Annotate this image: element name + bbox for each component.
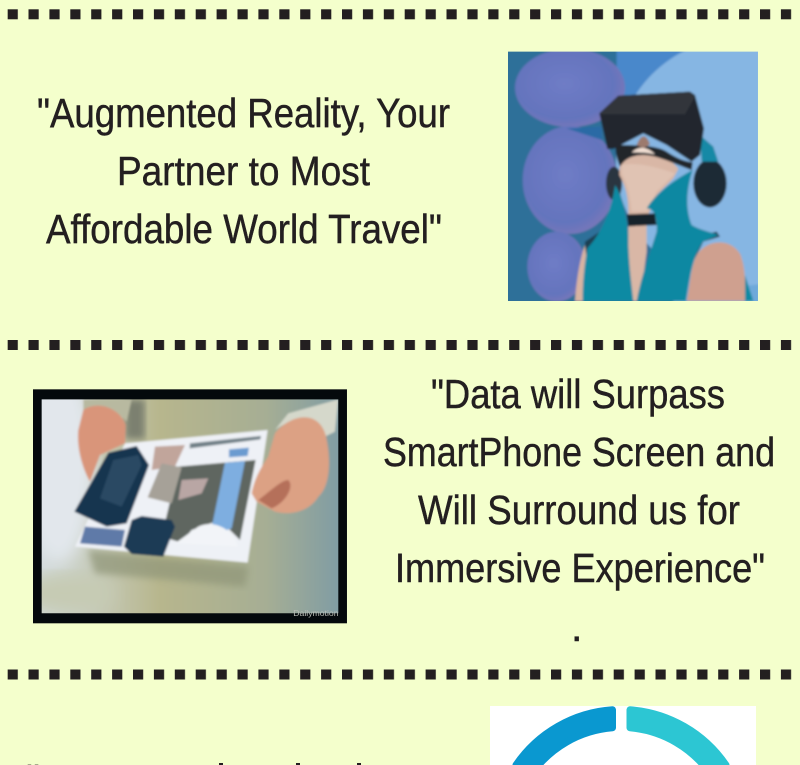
sub-element: left arm: [575, 245, 587, 301]
sub-element: dark blue footstool: [124, 516, 175, 557]
sub-element: shoulder: [687, 242, 745, 301]
donut chart, top two segments: [490, 706, 756, 765]
heading: data surpass smartphone quote: [383, 371, 775, 650]
sub-element: right hand: [252, 417, 329, 513]
sub-element: dark top strap: [584, 230, 721, 258]
sub-element: headphone: [606, 135, 727, 207]
sub-element: neck and chest: [619, 153, 678, 301]
heading: data surpass smartphone quote: Will Surround us for: [418, 487, 740, 533]
sub-element: watermark: Dailymotion: [293, 608, 339, 618]
heading: augmented reality travel quote: [37, 90, 450, 252]
teal segment: [630, 710, 726, 765]
heading: augmented reality travel quote: Affordable World Travel": [46, 206, 442, 252]
blue segment: [516, 710, 612, 765]
heading: data surpass smartphone quote: .: [571, 604, 582, 650]
sub-element: choker: [627, 213, 657, 226]
sub-element: left sleeve: [83, 399, 132, 422]
photo: woman wearing VR headset: [508, 52, 758, 301]
sub-element: teal hair: [583, 185, 633, 301]
photo: hands holding IKEA catalogue with AR furniture: [33, 389, 347, 624]
sub-element: left hand: [78, 406, 126, 482]
heading: augmented reality travel quote: Partner to Most: [117, 148, 371, 194]
sub-element: catalogue page: [75, 430, 268, 563]
heading: data surpass smartphone quote: "Data will Surpass: [431, 371, 725, 417]
sub-element: right sleeve: [275, 399, 338, 437]
sub-element: grey table: [148, 463, 182, 503]
sub-element: dark blue sofa: [74, 446, 149, 527]
sub-element: VR headset: [599, 92, 704, 170]
heading: augmented reality travel quote: "Augmented Reality, Your: [37, 90, 450, 136]
